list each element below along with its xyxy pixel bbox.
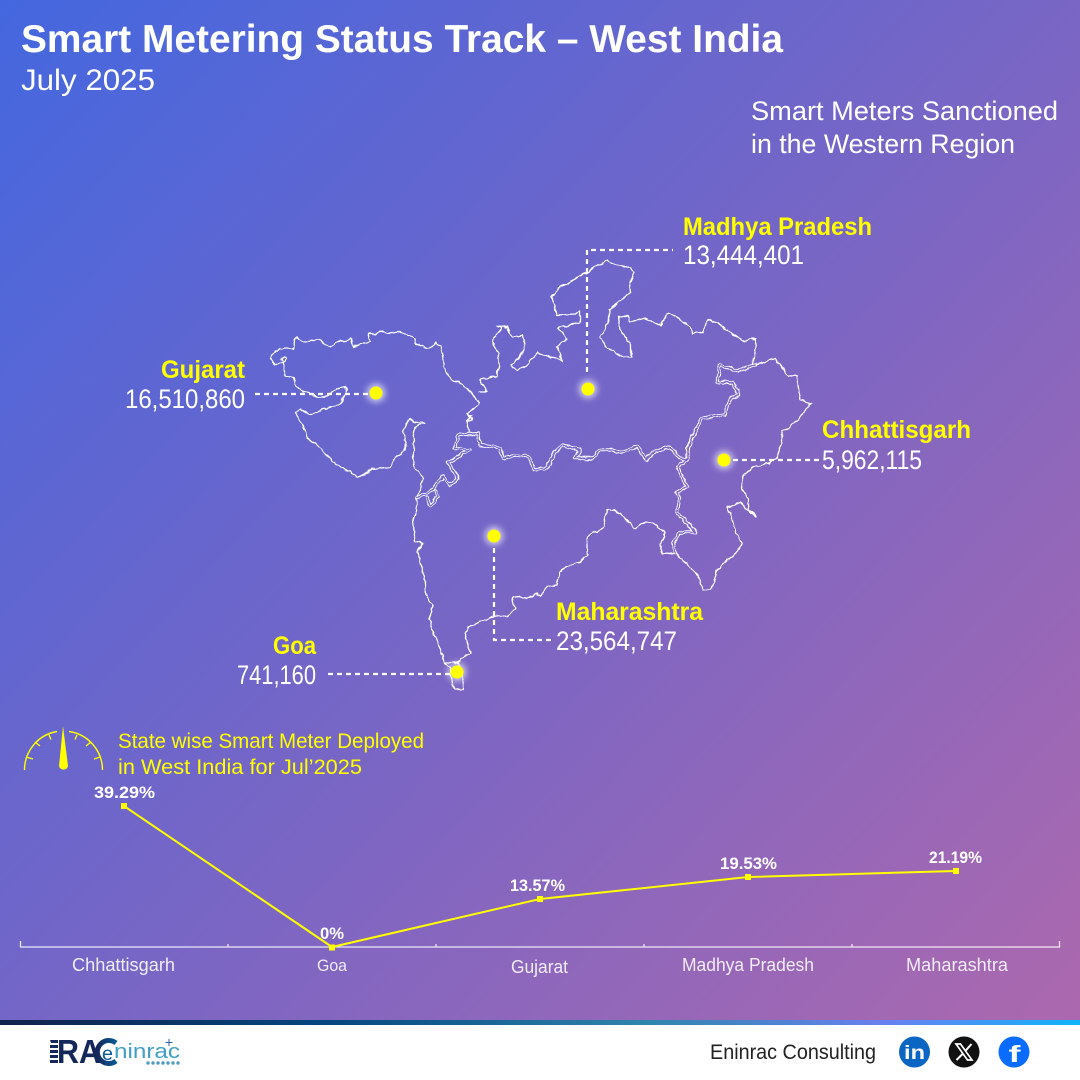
subtitle: July 2025 xyxy=(21,64,155,97)
data labels: 13.57% xyxy=(510,876,565,895)
label: maharashtra xyxy=(556,598,704,656)
title: Smart Metering Status Track – West India xyxy=(21,18,783,61)
category labels: Gujarat xyxy=(511,957,568,977)
marker: madhya pradesh xyxy=(579,380,597,398)
outline: outer boundary xyxy=(270,260,811,663)
icon: linkedin xyxy=(899,1036,930,1068)
icon: gauge xyxy=(24,726,103,770)
category labels: Goa xyxy=(317,956,348,975)
data labels: 21.19% xyxy=(929,848,982,867)
map heading: in the Western Region xyxy=(751,129,1015,159)
data points xyxy=(121,803,959,950)
data labels: 39.29% xyxy=(94,783,155,802)
leader lines xyxy=(255,250,821,674)
label: maharashtra: 23,564,747 xyxy=(556,626,677,656)
label: chhattisgarh: 5,962,115 xyxy=(822,445,922,475)
map heading: Smart Meters Sanctioned xyxy=(751,96,1058,126)
map: west india state outlines xyxy=(270,260,811,689)
chart axis xyxy=(20,941,1060,947)
icon: x xyxy=(948,1036,980,1068)
category labels: Chhattisgarh xyxy=(72,955,175,975)
marker: gujarat xyxy=(367,384,385,402)
label: goa: Goa xyxy=(273,632,317,660)
label: gujarat xyxy=(125,356,246,414)
footer strip xyxy=(0,1020,1080,1025)
label: madhya pradesh xyxy=(683,213,872,270)
outline: goa xyxy=(445,663,463,689)
outline: double-line inner state borders xyxy=(417,365,756,553)
label: gujarat: 16,510,860 xyxy=(125,384,245,414)
icon: facebook: f xyxy=(1008,1041,1021,1067)
data labels: 0% xyxy=(320,924,344,943)
data labels: 19.53% xyxy=(720,854,777,873)
chart heading xyxy=(118,730,424,779)
label: goa xyxy=(237,632,317,690)
icon: linkedin: in xyxy=(904,1043,925,1064)
label: goa: 741,160 xyxy=(237,660,316,690)
map heading xyxy=(751,96,1058,159)
logo: RA xyxy=(57,1033,101,1070)
logo: e xyxy=(102,1044,113,1065)
category labels xyxy=(72,955,1009,977)
category labels: Madhya Pradesh xyxy=(682,955,814,975)
logo: ninrac xyxy=(114,1041,180,1063)
marker: goa xyxy=(448,663,466,681)
data line xyxy=(124,806,956,947)
footer panel xyxy=(0,1025,1080,1080)
marker: maharashtra xyxy=(485,527,503,545)
chart heading: in West India for Jul’2025 xyxy=(118,756,362,779)
label: madhya pradesh: Madhya Pradesh xyxy=(683,213,872,241)
category labels: Maharashtra xyxy=(906,955,1009,975)
line chart xyxy=(20,783,1060,977)
marker: chhattisgarh xyxy=(715,451,733,469)
label: gujarat: Gujarat xyxy=(161,356,246,384)
chart heading: State wise Smart Meter Deployed xyxy=(118,730,424,753)
footer brand name: Eninrac Consulting xyxy=(710,1041,876,1064)
label: chhattisgarh xyxy=(822,416,971,475)
icon: facebook xyxy=(998,1036,1030,1068)
label: chhattisgarh: Chhattisgarh xyxy=(822,416,971,444)
label: madhya pradesh: 13,444,401 xyxy=(683,240,804,270)
logo xyxy=(50,1033,180,1070)
label: maharashtra: Maharashtra xyxy=(556,598,704,626)
data labels xyxy=(94,783,982,943)
